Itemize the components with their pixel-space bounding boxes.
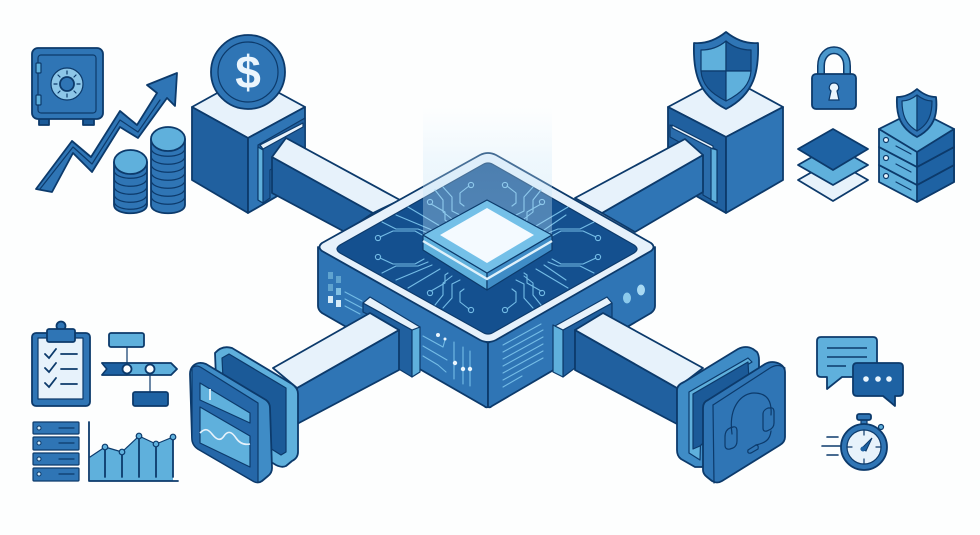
back plate	[677, 347, 759, 467]
slider dots	[436, 333, 472, 371]
connector plate	[258, 118, 305, 203]
south-east hub connector	[553, 297, 612, 377]
south-east arm	[575, 313, 703, 424]
north-east module: security block	[575, 32, 783, 232]
south-west arm	[273, 313, 399, 424]
small shield	[897, 89, 936, 137]
screen upper panel	[200, 383, 250, 423]
icon: process timeline	[102, 333, 177, 406]
icon: safe	[32, 48, 103, 125]
central chip	[423, 200, 552, 290]
icon: rising arrow	[36, 73, 177, 192]
south-east terminal	[677, 347, 785, 483]
south-west hub connector	[363, 297, 420, 377]
icon: layered sheets	[798, 129, 868, 201]
back plate	[215, 347, 298, 467]
recess	[689, 358, 752, 460]
block right face	[726, 107, 783, 213]
block top face	[192, 76, 305, 138]
circuit traces	[375, 182, 601, 313]
front plate	[703, 362, 785, 483]
block top face	[668, 76, 783, 137]
icon: checklist clipboard	[32, 322, 90, 406]
icon: tall coin stack	[151, 127, 185, 213]
icon: server rack	[33, 422, 79, 481]
headset icon	[725, 393, 774, 453]
north-west module: finance block	[192, 35, 400, 232]
status squares	[328, 272, 341, 307]
hub left side	[318, 247, 488, 407]
side text lines	[503, 324, 543, 387]
light beam	[423, 107, 552, 235]
shield emblem	[694, 32, 758, 109]
block left face	[668, 107, 726, 213]
hub inner board	[337, 163, 637, 334]
coin with dollar sign	[211, 35, 285, 109]
icon: padlock	[812, 50, 856, 109]
icon: server stack with shield	[879, 89, 954, 202]
hub right side	[488, 247, 655, 407]
front plate	[190, 363, 272, 482]
icon: area chart	[89, 422, 178, 481]
coin with dollar sign: $	[235, 46, 261, 98]
icon: chat bubbles	[817, 337, 903, 406]
block right face	[248, 107, 305, 213]
indicator lights	[623, 284, 645, 304]
south-west terminal	[190, 347, 298, 482]
central hub	[318, 107, 655, 407]
screen marker	[209, 389, 211, 400]
screen lower panel	[200, 407, 250, 467]
connector plate	[670, 125, 717, 203]
icon: stopwatch	[822, 414, 887, 470]
north-east arm	[575, 139, 703, 232]
waveform	[200, 430, 250, 444]
hub top rim	[320, 153, 654, 342]
north-west arm	[272, 138, 400, 232]
side vents and sliders	[345, 292, 470, 386]
back plate recess	[222, 354, 286, 455]
block left face	[192, 107, 248, 213]
icon: short coin stack	[114, 150, 147, 213]
